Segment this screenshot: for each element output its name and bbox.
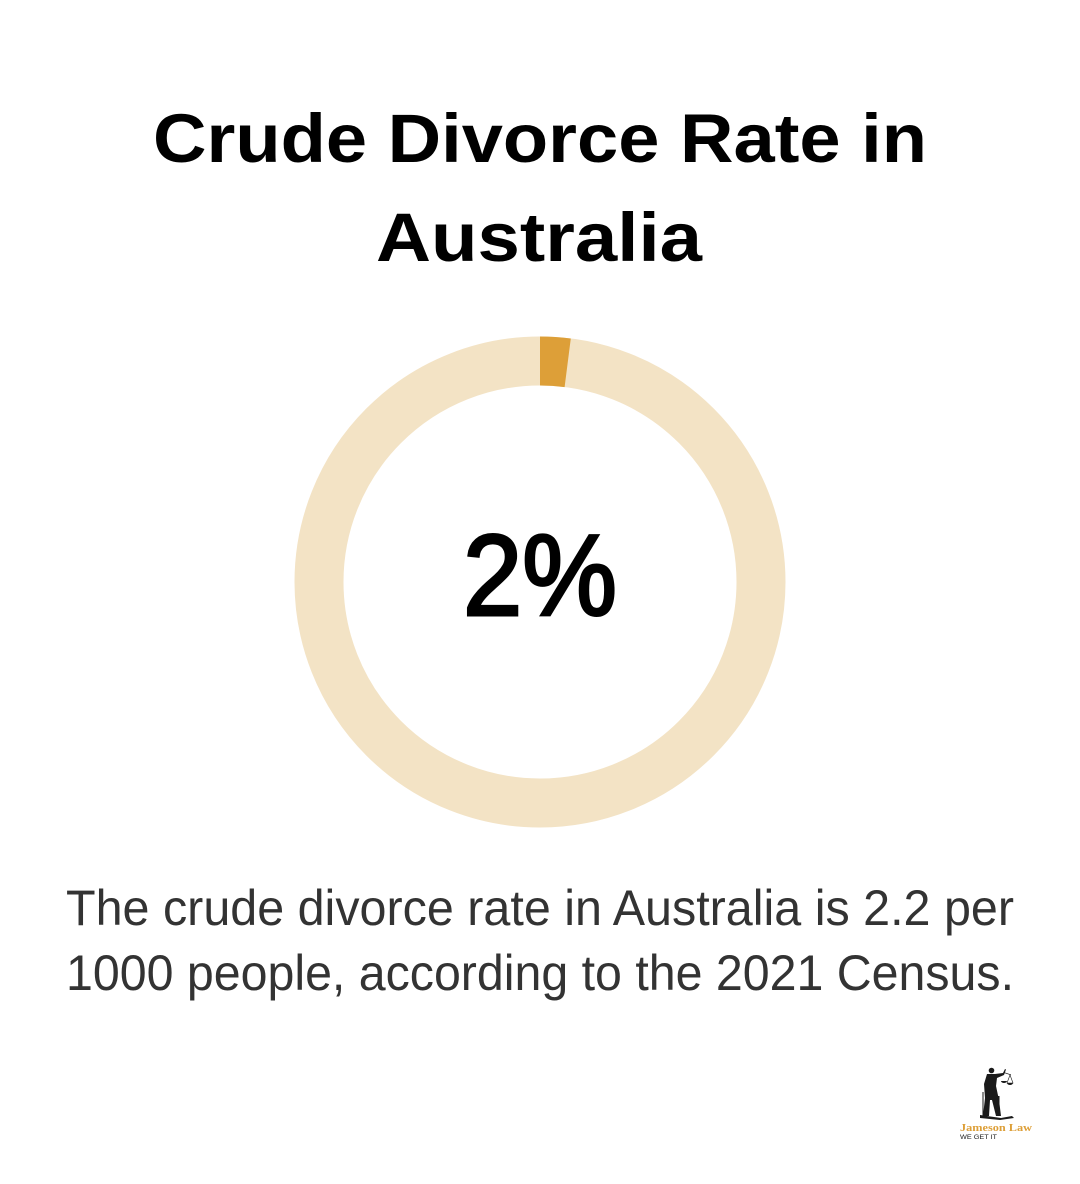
donut segment: 2% bbox=[540, 336, 571, 387]
title: Australia bbox=[376, 199, 703, 276]
title: Crude Divorce Rate in bbox=[153, 100, 927, 177]
logo tagline: WE GET IT bbox=[960, 1134, 997, 1141]
logo name: Jameson Law bbox=[960, 1123, 1032, 1134]
logo: Jameson Law bbox=[960, 1068, 1032, 1141]
donut chart bbox=[319, 336, 761, 803]
title bbox=[153, 100, 927, 276]
description bbox=[66, 880, 1014, 1001]
description: The crude divorce rate in Australia is 2.2 per bbox=[66, 880, 1014, 936]
icon: lady justice bbox=[980, 1068, 1014, 1120]
center value: 2% bbox=[463, 512, 617, 640]
donut track bbox=[319, 361, 761, 803]
description: 1000 people, according to the 2021 Census. bbox=[66, 945, 1014, 1001]
